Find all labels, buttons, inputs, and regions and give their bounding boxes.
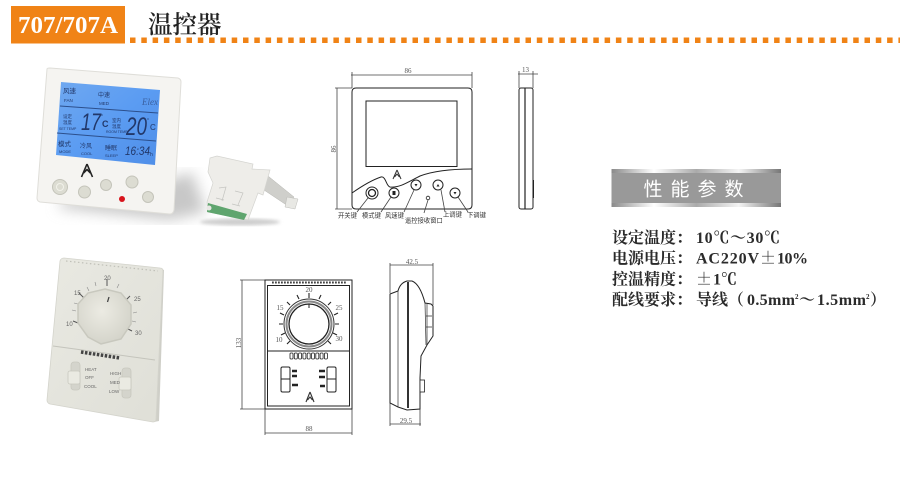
dial: 15 [276, 304, 284, 312]
LCD screen: 温度 [63, 119, 72, 126]
product photo: mechanical thermostat: HEAT [85, 367, 97, 372]
button labels: 上调键 [443, 210, 463, 218]
technical drawing: digital thermostat side view [518, 66, 538, 209]
dimension: width 88 [265, 409, 352, 435]
dimension: depth 42.5: 42.5 [406, 258, 419, 266]
leader lines [357, 190, 468, 213]
product photo: relay module [200, 156, 298, 226]
spec: wiring [612, 291, 886, 309]
module body [207, 156, 270, 220]
screen outline [366, 101, 457, 166]
product photo: digital thermostat [37, 68, 206, 220]
spec: wiring: ） [870, 291, 886, 309]
dimension: width 86: 86 [404, 67, 412, 75]
dial: 30 [336, 335, 343, 343]
panel: performance parameters heading [612, 169, 781, 207]
body outline [265, 280, 352, 409]
LCD screen: MED [99, 101, 110, 106]
LCD screen: 冷风 [80, 142, 92, 150]
spec: accuracy: ± [696, 266, 712, 290]
dial knob [78, 289, 131, 344]
front outline [352, 88, 472, 209]
product photo: mechanical thermostat: 25 [134, 297, 141, 303]
LCD screen: 17 [81, 109, 102, 136]
product photo: mechanical thermostat: 20 [104, 276, 111, 282]
spec: voltage: AC220V [696, 250, 759, 268]
dimension: height 133 [235, 280, 265, 409]
LCD screen: 设定 [63, 113, 72, 120]
LCD screen: MODE [59, 149, 71, 154]
product photo: mechanical thermostat: MED [110, 380, 121, 385]
LCD screen: 风速 [63, 87, 76, 95]
LCD screen: SET TEMP [59, 127, 77, 131]
dial scale [72, 279, 137, 331]
cable connector [285, 197, 298, 209]
LCD screen: C [150, 123, 156, 132]
header badge: model number: 707/707A [18, 13, 119, 39]
vent slots [81, 352, 120, 358]
technical drawing: digital thermostat front view [330, 67, 487, 224]
spec: temperature range: 10℃～30℃ [696, 230, 780, 247]
LCD screen: 温度 [112, 123, 121, 130]
spec: voltage: ± [760, 246, 776, 268]
button labels: 开关键 [338, 210, 358, 220]
spec: accuracy [612, 266, 737, 290]
button labels: 遥控接收窗口 [405, 216, 443, 224]
spec: accuracy: 控温精度： [612, 270, 692, 288]
dimension: width 86 [351, 67, 472, 88]
spec: wiring: 2 [866, 293, 870, 301]
spec: temperature range: 设定温度： [612, 228, 692, 247]
spec: voltage [612, 246, 808, 268]
side profile [390, 281, 433, 410]
dial: 10 [276, 336, 283, 344]
spec: wiring: 0.5mm [747, 292, 796, 309]
dial: 25 [336, 304, 343, 312]
LCD screen: 室内 [112, 117, 121, 124]
dial [276, 286, 343, 349]
LCD screen: ° [101, 114, 103, 120]
button labels: 下调键 [467, 210, 487, 219]
button labels: 模式键 [362, 210, 382, 220]
slider switches [68, 362, 131, 398]
dimension: height 133: 133 [235, 337, 243, 348]
button labels [338, 210, 487, 224]
LCD screen: FAN [64, 98, 73, 103]
product photo: mechanical thermostat: 30 [135, 331, 142, 337]
heading: product name: 温控器 [148, 11, 222, 39]
dimension: height 86: 86 [330, 145, 338, 152]
logo [393, 170, 401, 179]
logo [82, 164, 92, 177]
LCD screen: 模式 [58, 139, 72, 148]
spec: wiring: 导线 [696, 291, 728, 309]
button labels: 风速键 [385, 210, 405, 220]
ribbon cable [264, 176, 294, 206]
terminal block [207, 203, 247, 220]
dimension: height 86 [330, 88, 352, 209]
LCD screen: h [150, 152, 153, 158]
LCD screen: 中速 [98, 91, 110, 99]
LCD screen: Elex [141, 97, 158, 107]
dimension: depth 29.5 [390, 403, 421, 426]
dial: 20 [306, 286, 313, 294]
spec: wiring: （ [728, 291, 744, 309]
LCD screen: 20 [125, 113, 147, 141]
technical drawing: digital thermostat side view: 13 [522, 66, 530, 74]
logo [306, 392, 314, 402]
header badge: model number [11, 6, 125, 44]
product photo: mechanical thermostat: 10 [66, 322, 73, 328]
panel: performance parameters heading: 性能参数 [643, 178, 752, 200]
LCD screen: ° [147, 118, 149, 124]
product photo: mechanical thermostat: LOW [109, 389, 120, 394]
dimension: depth 29.5: 29.5 [400, 417, 413, 425]
spec: voltage: 10% [777, 250, 808, 268]
product photo: mechanical thermostat: HIGH [110, 371, 121, 376]
spec: temperature range [612, 228, 780, 247]
dotted header rule [130, 38, 900, 43]
product photo: mechanical thermostat: OFF [85, 375, 94, 380]
LCD screen: 睡眠 [105, 144, 117, 152]
LCD screen: ROOM TEMP [106, 130, 128, 134]
LCD screen [56, 82, 160, 165]
indicator slots [290, 353, 327, 359]
sliders [281, 367, 336, 392]
dimension: width 88: 88 [306, 425, 313, 433]
dimension: depth 42.5 [390, 258, 433, 305]
product photo: mechanical thermostat: 15 [74, 291, 81, 297]
LCD screen: SLEEP [105, 153, 118, 158]
spec: wiring: 1.5mm [817, 292, 867, 309]
spec: wiring: 2 [795, 293, 799, 301]
technical drawing: mechanical thermostat side view [390, 258, 433, 426]
spec: wiring: 配线要求： [612, 291, 692, 309]
indicator light [119, 196, 125, 202]
spec: voltage: 电源电压： [612, 250, 692, 268]
curved panel line [352, 169, 472, 193]
buttons [366, 180, 460, 200]
spec: accuracy: 1℃ [713, 272, 737, 288]
specification list [612, 228, 886, 309]
spec: wiring: ～ [799, 292, 815, 309]
LCD screen: 16:34 [125, 144, 150, 158]
LCD screen: C [102, 119, 109, 129]
front buttons [52, 176, 154, 202]
technical drawing: mechanical thermostat front view [235, 280, 352, 435]
product photo: mechanical thermostat [47, 258, 164, 422]
LCD screen: COOL [81, 151, 93, 156]
product photo: mechanical thermostat: COOL [84, 384, 97, 389]
